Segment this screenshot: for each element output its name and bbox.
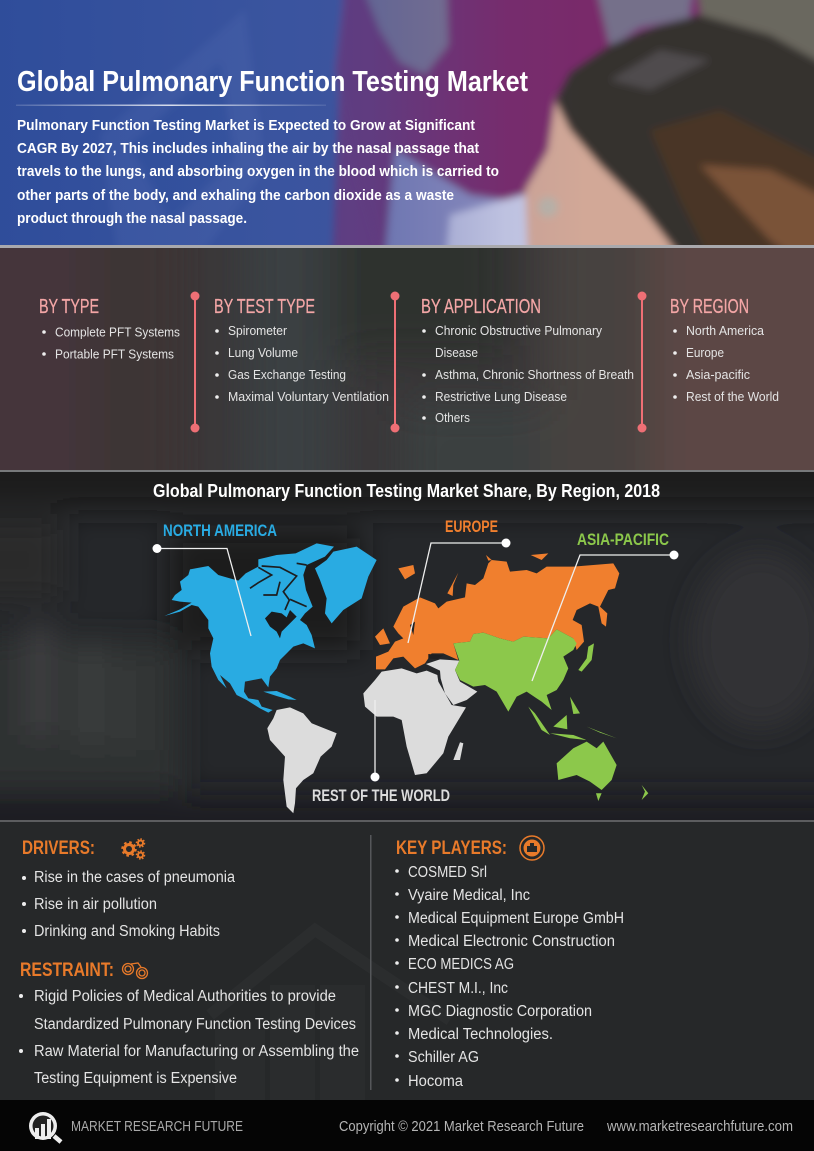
map panel	[0, 472, 814, 820]
column: by test type: BY TEST TYPE	[214, 296, 315, 318]
map: asia-pacific	[453, 629, 648, 801]
column: by region	[670, 296, 779, 404]
key players list: Medical Equipment Europe GmbH	[408, 910, 624, 927]
icon: handcuffs	[122, 963, 148, 978]
icon: gears	[122, 839, 144, 859]
key players list: CHEST M.I., Inc	[408, 980, 508, 997]
intro paragraph: other parts of the body, and exhaling the carbon dioxide as a waste	[17, 188, 454, 204]
restraint list	[19, 988, 359, 1087]
column: by test type	[214, 296, 389, 404]
header photo panel	[0, 0, 814, 245]
segmentation panel	[0, 245, 814, 472]
column: by region: North America	[686, 323, 765, 338]
copyright: Copyright © 2021 Market Research Future	[339, 1119, 584, 1135]
icon: key players badge	[520, 836, 544, 860]
column: by application: Restrictive Lung Disease	[435, 389, 567, 404]
map: europe and russia	[375, 553, 619, 669]
column: by application: BY APPLICATION	[421, 296, 541, 318]
key players list: COSMED Srl	[408, 864, 487, 881]
key players list: Schiller AG	[408, 1049, 479, 1066]
key players list: ECO MEDICS AG	[408, 956, 514, 973]
key players list: Medical Technologies.	[408, 1026, 553, 1043]
chart title: Global Pulmonary Function Testing Market Share, By Region, 2018	[153, 481, 660, 501]
column: by region: BY REGION	[670, 296, 749, 318]
column: by test type: Spirometer	[228, 323, 288, 338]
key players list	[395, 864, 624, 1090]
restraint heading: RESTRAINT:	[20, 960, 114, 981]
map: rest of the world	[267, 659, 477, 813]
column: by test type: Lung Volume	[228, 345, 298, 360]
restraint list: Rigid Policies of Medical Authorities to provide	[34, 988, 336, 1005]
column: by test type: Gas Exchange Testing	[228, 367, 346, 382]
column: by region: Asia-pacific	[686, 367, 750, 382]
title rule	[16, 104, 326, 106]
restraint list: Testing Equipment is Expensive	[34, 1070, 237, 1087]
callout: rest of the world: REST OF THE WORLD	[312, 787, 450, 805]
key players heading: KEY PLAYERS:	[396, 838, 507, 859]
callout: rest of the world	[312, 700, 450, 805]
column: by type: Complete PFT Systems	[55, 324, 180, 340]
icon: logo	[29, 1112, 61, 1142]
column: by type: BY TYPE	[39, 296, 99, 318]
divider 3	[638, 292, 646, 432]
column: by application: Disease	[435, 345, 478, 360]
column: by region: Europe	[686, 345, 724, 360]
footer	[0, 1100, 814, 1151]
key players list: Hocoma	[408, 1073, 463, 1090]
title: Global Pulmonary Function Testing Market	[17, 66, 528, 98]
drivers heading: DRIVERS:	[22, 838, 95, 859]
column: by application	[421, 296, 634, 425]
column: by application: Chronic Obstructive Pulmonary	[435, 323, 602, 338]
column: by application: Others	[435, 410, 470, 425]
divider 1	[190, 292, 200, 432]
drivers list: Rise in the cases of pneumonia	[34, 869, 235, 886]
column: by type: Portable PFT Systems	[55, 346, 174, 362]
callout: europe: EUROPE	[445, 518, 498, 536]
callout: north america: NORTH AMERICA	[163, 522, 277, 540]
column: by region: Rest of the World	[686, 389, 779, 404]
world map	[164, 543, 648, 813]
callout: asia-pacific	[532, 531, 678, 681]
column: by application: Asthma, Chronic Shortness of Breath	[435, 367, 634, 382]
key players list: MGC Diagnostic Corporation	[408, 1003, 592, 1020]
company name: MARKET RESEARCH FUTURE	[71, 1119, 243, 1135]
website: www.marketresearchfuture.com	[606, 1119, 793, 1135]
restraint list: Raw Material for Manufacturing or Assembling the	[34, 1043, 359, 1060]
divider 2	[390, 292, 400, 432]
drivers list	[22, 869, 235, 940]
key players list: Vyaire Medical, Inc	[408, 887, 530, 904]
intro paragraph: product through the nasal passage.	[17, 211, 247, 227]
callout: europe	[408, 518, 510, 643]
map: north america	[164, 543, 377, 713]
callout: asia-pacific: ASIA-PACIFIC	[577, 531, 669, 549]
drivers list: Drinking and Smoking Habits	[34, 923, 220, 940]
intro paragraph: Pulmonary Function Testing Market is Expected to Grow at Significant	[17, 118, 475, 134]
intro paragraph	[17, 118, 499, 227]
intro paragraph: travels to the lungs, and absorbing oxygen in the blood which is carried to	[17, 164, 499, 180]
column: by type	[39, 296, 180, 362]
key players list: Medical Electronic Construction	[408, 933, 615, 950]
callout: north america	[152, 522, 277, 636]
restraint list: Standardized Pulmonary Function Testing Devices	[34, 1016, 356, 1033]
intro paragraph: CAGR By 2027, This includes inhaling the air by the nasal passage that	[17, 141, 479, 157]
lower panel	[0, 820, 814, 1101]
column: by test type: Maximal Voluntary Ventilation	[228, 389, 389, 404]
drivers list: Rise in air pollution	[34, 896, 157, 913]
